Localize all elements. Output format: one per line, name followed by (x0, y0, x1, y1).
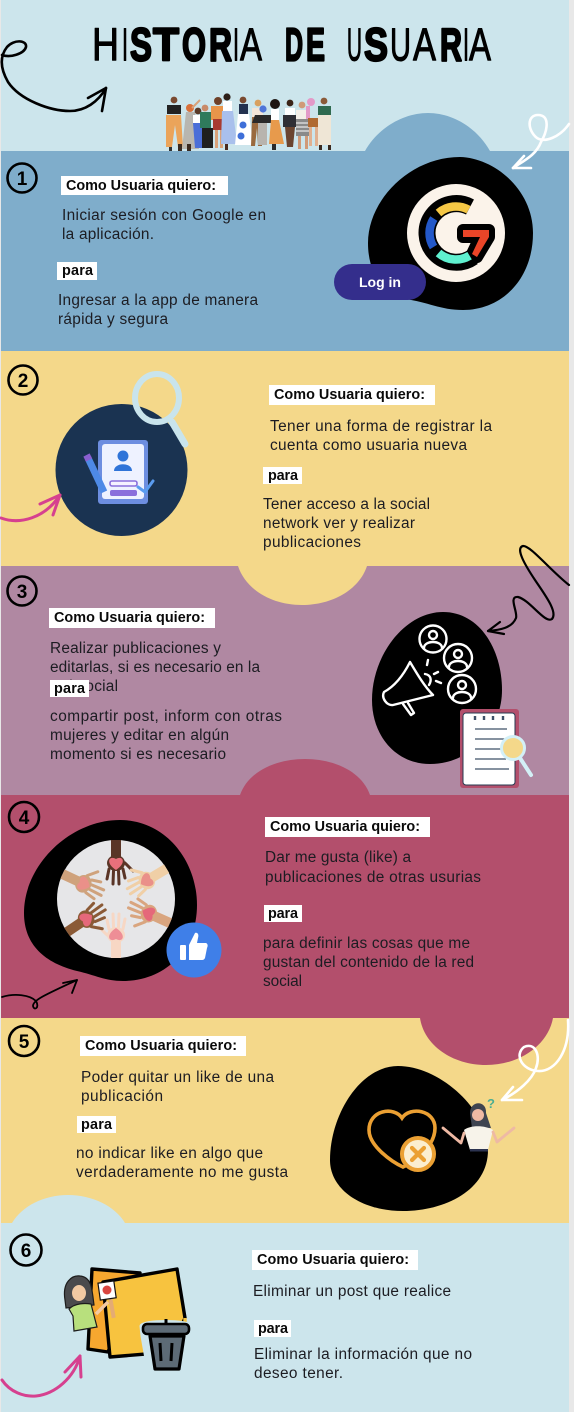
title: I (122, 18, 128, 70)
text: purpose 5: verdaderamente no me gusta (76, 1164, 288, 1181)
number 2: 2 (18, 371, 28, 392)
illustration: woman shrugging: ? (487, 1096, 495, 1111)
title: O (182, 18, 206, 70)
title: H (92, 18, 119, 70)
label: Como Usuaria quiero: Como Usuaria quiero: (54, 610, 205, 626)
panel: story 2 (1, 366, 492, 551)
illustration: woman shrugging (443, 1096, 514, 1152)
arrow: black curl top left (2, 41, 106, 111)
title: S (364, 18, 388, 70)
text: want 2: Tener una forma de registrar la (270, 418, 492, 435)
text: purpose 2: publicaciones (263, 534, 361, 551)
title: S (130, 18, 152, 70)
title: A (240, 18, 262, 70)
arrow: pink (2, 1356, 81, 1396)
icon: blob with megaphone and users (372, 612, 502, 764)
button: Log in (334, 264, 426, 300)
panel: story 1 (8, 115, 569, 328)
icon: blue like button (166, 922, 222, 978)
number 6 (10, 1234, 42, 1266)
title: D (278, 18, 303, 70)
arrow: black loop (2, 980, 77, 1008)
arrow: pink (1, 495, 60, 521)
label: Como Usuaria quiero: Como Usuaria quiero: (257, 1252, 409, 1268)
text: purpose 2: Tener acceso a la social (263, 496, 430, 513)
text: purpose 3: compartir post, inform con otras (50, 708, 282, 725)
text: purpose 6: deseo tener. (254, 1365, 343, 1382)
title: A (413, 18, 436, 70)
label: Como Usuaria quiero: Como Usuaria quiero: (270, 819, 420, 835)
text: purpose 5: no indicar like en algo que (76, 1145, 263, 1162)
label: para: para (258, 1321, 289, 1337)
icon: blob with circle of hands (24, 820, 197, 981)
text: purpose 6: Eliminar la información que no (254, 1346, 472, 1363)
label: para: para (81, 1117, 113, 1133)
label: Como Usuaria quiero: Como Usuaria quiero: (274, 387, 425, 403)
text: want 3: red social (50, 678, 118, 695)
arrow: white curl (513, 115, 569, 168)
label: para: para (54, 681, 86, 697)
text: purpose 3: mujeres y editar en algún (50, 727, 229, 744)
number 6: 6 (21, 1241, 31, 1262)
panel: story 6 (2, 1234, 472, 1396)
text: purpose 2: network ver y realizar (263, 515, 415, 532)
number 4: 4 (19, 808, 30, 829)
text: want 2: cuenta como usuaria nueva (270, 437, 467, 454)
text: want 4: Dar me gusta (like) a (265, 849, 411, 866)
text: want 5: Poder quitar un like de una (81, 1069, 274, 1086)
text: want 3: Realizar publicaciones y (50, 640, 221, 657)
illustration: group of women (166, 93, 331, 151)
number 5 (9, 1026, 39, 1056)
title: U (390, 18, 411, 70)
icon: black blob with Google logo (368, 157, 533, 310)
title: E (306, 18, 325, 70)
label: Como Usuaria quiero: Como Usuaria quiero: (85, 1038, 237, 1054)
text: want 3: editarlas, si es necesario en la (50, 659, 260, 676)
number 1 (8, 164, 36, 192)
title: I (463, 18, 469, 70)
text: purpose 4: gustan del contenido de la red (263, 954, 474, 971)
text: purpose 3: momento si es necesario (50, 746, 226, 763)
icon: magnifying glass (135, 374, 185, 444)
title: U (341, 18, 362, 70)
illustration: woman with sign (64, 1276, 116, 1331)
text: purpose 4: para definir las cosas que me (263, 935, 470, 952)
arrow: white loop (502, 1020, 568, 1100)
text: want 1: Iniciar sesión con Google en (62, 207, 266, 224)
label: para (57, 262, 97, 280)
arrow: black squiggle (488, 546, 569, 634)
label: Como Usuaria quiero: Como Usuaria quiero: (66, 178, 216, 194)
label: para: para (62, 263, 94, 279)
button: Log in: Log in (359, 274, 401, 290)
icon: blob with broken heart (330, 1066, 488, 1211)
text: want 5: publicación (81, 1088, 163, 1105)
text: want 4: publicaciones de otras usurias (265, 869, 481, 886)
number 1: 1 (17, 169, 28, 190)
text: purpose 1: Ingresar a la app de manera (58, 292, 258, 309)
title: R (440, 18, 462, 70)
label: para: para (268, 468, 299, 484)
text: want 1: la aplicación. (62, 226, 154, 243)
icon: notepad with magnifier (460, 709, 531, 788)
title: A (469, 18, 491, 70)
title: R (209, 18, 232, 70)
number 5: 5 (19, 1032, 30, 1053)
number 3 (8, 576, 36, 606)
number 4 (9, 802, 39, 832)
text: purpose 1: rápida y segura (58, 311, 168, 328)
icon: trash can (141, 1319, 190, 1370)
title: I (233, 18, 239, 70)
number 3: 3 (17, 582, 27, 603)
number 2 (8, 366, 38, 394)
panel: story 3 (8, 546, 569, 788)
icon: dark circle with profile form (56, 404, 188, 536)
text: purpose 4: social (263, 973, 302, 990)
label: para: para (268, 906, 299, 922)
icon: yellow papers (88, 1269, 185, 1357)
panel: story 5 (9, 1020, 568, 1211)
title: T (153, 18, 179, 70)
text: want 6: Eliminar un post que realice (253, 1283, 451, 1300)
panel: story 4 (2, 802, 481, 1008)
